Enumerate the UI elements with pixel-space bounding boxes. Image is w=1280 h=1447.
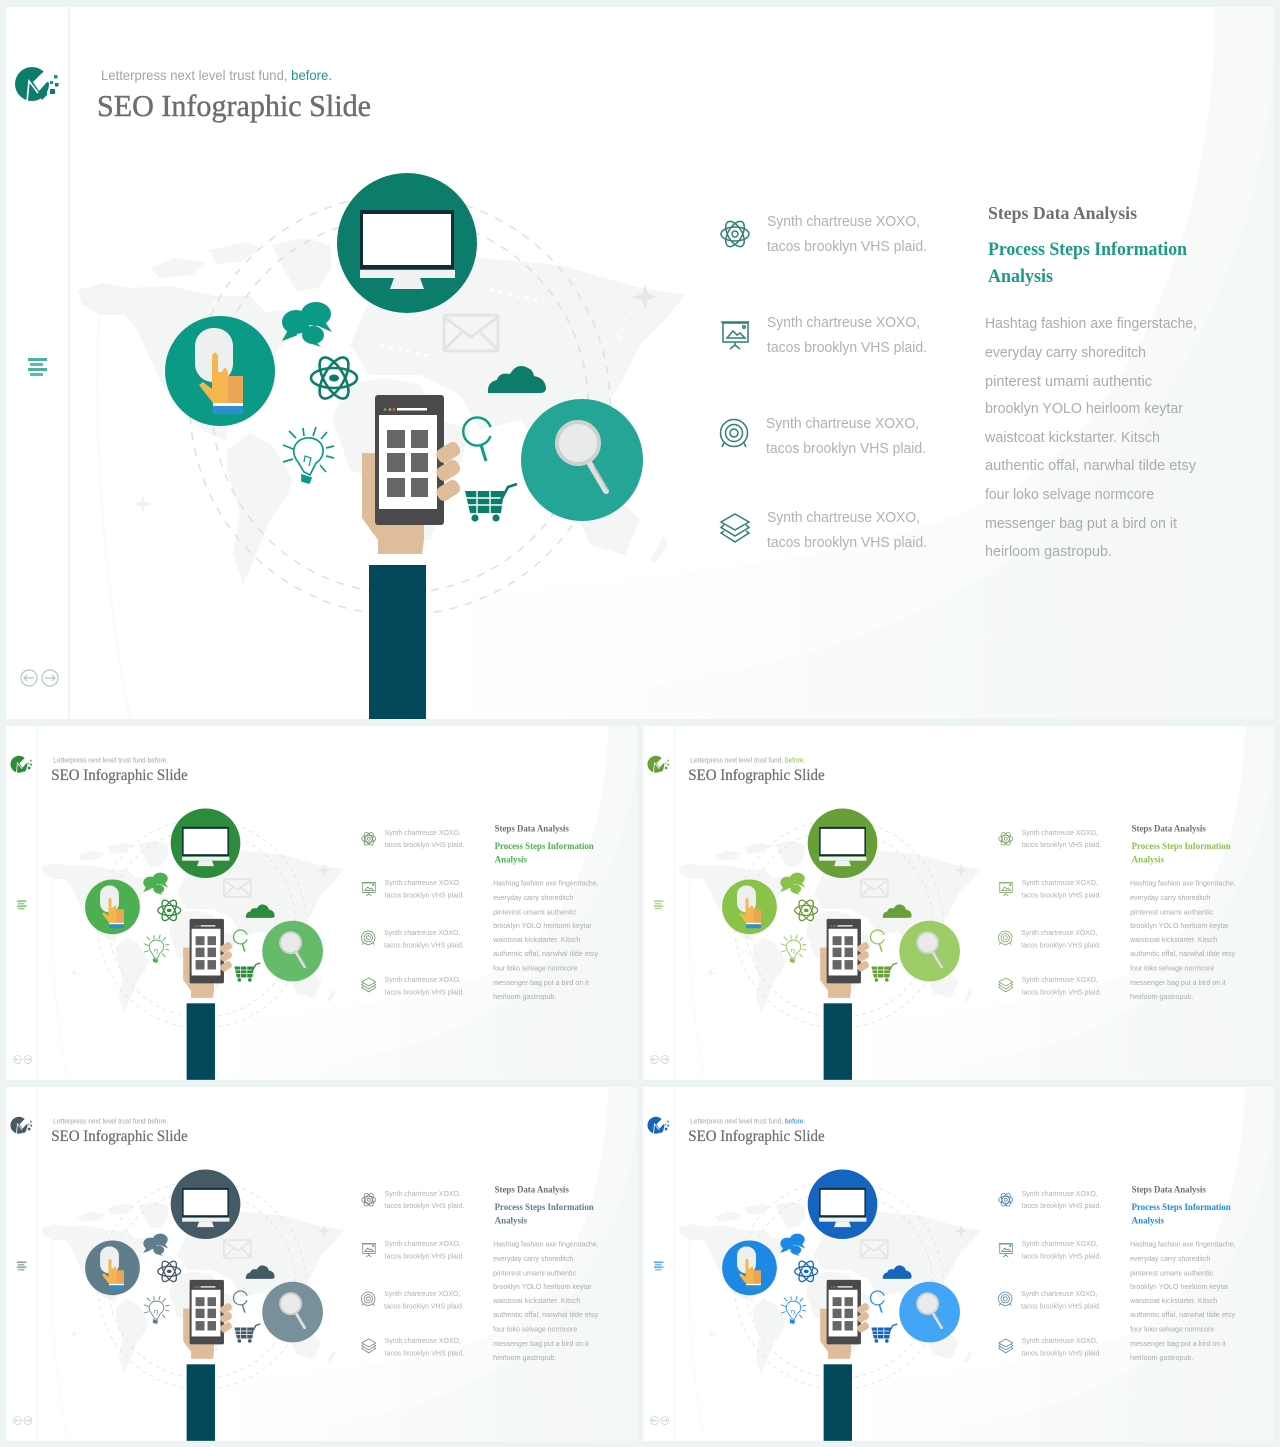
title: SEO Infographic Slide — [97, 88, 371, 123]
body text: pinterest umami authentic — [493, 1268, 577, 1277]
list item 3 — [766, 415, 926, 457]
heading: process — [495, 1203, 594, 1227]
heading: process: Process Steps Information — [988, 239, 1187, 260]
hand holding phone — [820, 919, 870, 998]
list item 1: Synth chartreuse XOXO, — [1022, 1189, 1098, 1198]
heading: process: Analysis — [988, 266, 1053, 287]
icon: shopping cart — [234, 963, 260, 982]
list item 2: Synth chartreuse XOXO, — [767, 314, 920, 331]
body text: authentic offal, narwhal tilde etsy — [1130, 1310, 1235, 1319]
list item 1: tacos brooklyn VHS plaid. — [1022, 1201, 1101, 1210]
body text: heirloom gastropub. — [1130, 992, 1193, 1001]
list item 4: Synth chartreuse XOXO, — [385, 975, 461, 984]
panel: blue slide — [643, 1087, 1274, 1441]
body text — [492, 1240, 599, 1362]
icon: atom — [311, 353, 357, 403]
icon: magnifier circle — [899, 1282, 960, 1342]
icon: monitor circle — [171, 808, 240, 878]
icon: list layers — [362, 1339, 376, 1353]
list item 3: Synth chartreuse XOXO, — [1021, 928, 1097, 937]
icon: list presentation — [721, 322, 749, 349]
list item 2: Synth chartreuse XOXO, — [1022, 878, 1098, 887]
list item 3 — [1021, 1289, 1101, 1311]
list item 2: Synth chartreuse XOXO, — [1022, 1239, 1098, 1248]
icon: light bulb — [283, 427, 334, 483]
world map — [78, 238, 685, 585]
slide background — [6, 726, 637, 1080]
icon: list layers — [999, 978, 1013, 992]
body text: four loko selvage normcore — [493, 1325, 577, 1334]
body text: authentic offal, narwhal tilde etsy — [493, 949, 598, 958]
icon: shopping cart — [871, 963, 897, 982]
body text: waistcoat kickstarter. Kitsch — [1129, 935, 1217, 944]
body text: pinterest umami authentic — [493, 907, 577, 916]
icon: menu — [28, 358, 47, 376]
body text: four loko selvage normcore — [985, 486, 1154, 503]
body text: heirloom gastropub. — [493, 1353, 556, 1362]
list item 4: Synth chartreuse XOXO, — [1022, 1336, 1098, 1345]
list item 1: tacos brooklyn VHS plaid. — [767, 238, 927, 255]
body text: Hashtag fashion axe fingerstache, — [985, 315, 1197, 332]
icon: small magnifier — [234, 930, 247, 952]
icon: envelope — [224, 1240, 251, 1258]
icon: envelope — [444, 315, 498, 351]
subtitle: Letterpress next level trust fund, before. — [690, 757, 805, 764]
hand holding phone — [183, 919, 233, 998]
list item 2 — [385, 1239, 464, 1260]
body text — [492, 879, 599, 1001]
hand holding phone — [362, 395, 462, 554]
arm sleeve — [824, 1364, 852, 1441]
icon: envelope — [224, 879, 251, 897]
slide background — [643, 1087, 1274, 1441]
icon: logo — [10, 755, 32, 773]
list item 3: Synth chartreuse XOXO, — [766, 415, 919, 432]
heading: process: Process Steps Information — [1132, 842, 1231, 852]
heading: process: Process Steps Information — [1132, 1203, 1231, 1213]
dashed orbit circles — [98, 819, 307, 1028]
body text: heirloom gastropub. — [493, 992, 556, 1001]
icon: menu — [17, 1261, 26, 1270]
world map — [42, 1202, 344, 1374]
icon: atom — [795, 1259, 818, 1284]
icon: light bulb — [781, 1296, 806, 1324]
icon: shopping cart — [871, 1324, 897, 1343]
list item 3 — [1021, 928, 1101, 950]
list item 3: Synth chartreuse XOXO, — [384, 1289, 460, 1298]
title: SEO Infographic Slide — [688, 767, 825, 784]
body text: four loko selvage normcore — [1130, 964, 1214, 973]
heading: process: Analysis — [1132, 1217, 1164, 1227]
heading: process: Process Steps Information — [495, 1203, 594, 1213]
body text: waistcoat kickstarter. Kitsch — [492, 1296, 580, 1305]
icon: list target — [362, 931, 375, 945]
list item 4 — [1022, 1336, 1101, 1357]
icon: list target — [720, 420, 748, 447]
arm sleeve — [187, 1364, 215, 1441]
icon: magnifier circle — [521, 399, 643, 521]
list item 2 — [767, 314, 927, 356]
title: SEO Infographic Slide — [51, 1128, 188, 1145]
icon: touch circle — [165, 316, 275, 426]
icon: speech bubbles — [143, 1234, 168, 1256]
hand holding phone — [183, 1280, 233, 1359]
icon: list atom — [999, 831, 1013, 847]
icon: light bulb — [144, 1296, 169, 1324]
icon: atom — [795, 898, 818, 923]
list item 4 — [385, 975, 464, 996]
world map — [679, 841, 981, 1013]
body text: everyday carry shoreditch — [493, 893, 573, 902]
heading: process: Analysis — [495, 1217, 527, 1227]
list item 4: Synth chartreuse XOXO, — [385, 1336, 461, 1345]
icon: list atom — [721, 218, 749, 250]
slide background — [6, 7, 1274, 719]
list item 4: tacos brooklyn VHS plaid. — [385, 1348, 464, 1357]
icon: small magnifier — [463, 418, 490, 461]
icon: navigation arrows — [13, 1055, 32, 1063]
icon: magnifier circle — [262, 1282, 323, 1342]
icon: atom — [158, 898, 181, 923]
icon: shopping cart — [234, 1324, 260, 1343]
icon: menu — [654, 900, 663, 909]
body text: messenger bag put a bird on it — [1130, 978, 1227, 987]
panel: light green slide — [643, 726, 1274, 1080]
body text: messenger bag put a bird on it — [493, 1339, 590, 1348]
list item 3: tacos brooklyn VHS plaid. — [766, 440, 926, 457]
icon: list atom — [999, 1192, 1013, 1208]
icon: small magnifier — [871, 930, 884, 952]
heading: process — [988, 239, 1187, 287]
icon: logo — [10, 1116, 32, 1134]
body text: authentic offal, narwhal tilde etsy — [985, 457, 1196, 474]
icon: logo — [647, 755, 669, 773]
list item 3: tacos brooklyn VHS plaid. — [384, 1302, 464, 1311]
list item 2: Synth chartreuse XOXO, — [385, 1239, 461, 1248]
title: SEO Infographic Slide — [688, 1128, 825, 1145]
heading: steps: Steps Data Analysis — [1132, 1184, 1206, 1194]
body text: pinterest umami authentic — [985, 373, 1152, 390]
icon: monitor circle — [171, 1169, 240, 1239]
icon: navigation arrows — [13, 1416, 32, 1424]
list item 4: tacos brooklyn VHS plaid. — [1022, 987, 1101, 996]
icon: list atom — [362, 1192, 376, 1208]
list item 3 — [384, 1289, 464, 1311]
list item 3 — [384, 928, 464, 950]
icon: logo — [647, 1116, 669, 1134]
body text: everyday carry shoreditch — [493, 1254, 573, 1263]
list item 1: Synth chartreuse XOXO, — [385, 828, 461, 837]
body text: Hashtag fashion axe fingerstache, — [493, 1240, 599, 1249]
icon: envelope — [861, 879, 888, 897]
icon: list layers — [721, 514, 749, 542]
arm sleeve — [824, 1003, 852, 1080]
heading: steps: Steps Data Analysis — [495, 823, 569, 833]
icon: speech bubbles — [282, 302, 332, 347]
body text: messenger bag put a bird on it — [493, 978, 590, 987]
dashed orbit circles — [735, 819, 944, 1028]
body text: waistcoat kickstarter. Kitsch — [492, 935, 580, 944]
icon: navigation arrows — [650, 1055, 669, 1063]
icon: light bulb — [144, 935, 169, 963]
icon: list presentation — [999, 883, 1013, 896]
list item 1: Synth chartreuse XOXO, — [1022, 828, 1098, 837]
list item 3: Synth chartreuse XOXO, — [384, 928, 460, 937]
icon: cloud — [246, 904, 275, 918]
icon: list target — [999, 1292, 1012, 1306]
list item 2: tacos brooklyn VHS plaid. — [385, 890, 464, 899]
body text: pinterest umami authentic — [1130, 907, 1214, 916]
heading: steps: Steps Data Analysis — [988, 203, 1137, 223]
icon: cloud — [883, 1265, 912, 1279]
list item 1 — [1022, 1189, 1101, 1210]
panel: green slide — [6, 726, 637, 1080]
icon: logo — [15, 66, 58, 102]
heading: process — [1132, 842, 1231, 866]
list item 2: Synth chartreuse XOXO, — [385, 878, 461, 887]
icon: list layers — [999, 1339, 1013, 1353]
icon: small magnifier — [871, 1291, 884, 1313]
list item 3: tacos brooklyn VHS plaid. — [1021, 1302, 1101, 1311]
list item 1 — [1022, 828, 1101, 849]
icon: envelope — [861, 1240, 888, 1258]
body text: everyday carry shoreditch — [1130, 893, 1210, 902]
body text: pinterest umami authentic — [1130, 1268, 1214, 1277]
icon: navigation arrows — [650, 1416, 669, 1424]
list item 4: tacos brooklyn VHS plaid. — [1022, 1348, 1101, 1357]
body text: messenger bag put a bird on it — [985, 515, 1178, 532]
body text — [984, 315, 1197, 560]
list item 3: tacos brooklyn VHS plaid. — [384, 941, 464, 950]
body text: heirloom gastropub. — [985, 543, 1112, 560]
list item 1: tacos brooklyn VHS plaid. — [1022, 840, 1101, 849]
icon: list layers — [362, 978, 376, 992]
icon: navigation arrows — [21, 670, 58, 686]
body text: everyday carry shoreditch — [985, 344, 1146, 361]
subtitle: Letterpress next level trust fund, before. — [101, 67, 332, 83]
icon: touch circle — [85, 1241, 140, 1295]
body text — [1129, 879, 1236, 1001]
body text: Hashtag fashion axe fingerstache, — [1130, 1240, 1236, 1249]
list item 4: Synth chartreuse XOXO, — [1022, 975, 1098, 984]
icon: light bulb — [781, 935, 806, 963]
body text — [1129, 1240, 1236, 1362]
list item 4: tacos brooklyn VHS plaid. — [767, 534, 927, 551]
icon: list presentation — [999, 1244, 1013, 1257]
list item 2: tacos brooklyn VHS plaid. — [1022, 890, 1101, 899]
icon: list target — [362, 1292, 375, 1306]
heading: process: Process Steps Information — [495, 842, 594, 852]
list item 4: tacos brooklyn VHS plaid. — [385, 987, 464, 996]
world map — [42, 841, 344, 1013]
list item 1: Synth chartreuse XOXO, — [385, 1189, 461, 1198]
list item 1: Synth chartreuse XOXO, — [767, 213, 920, 230]
list item 1 — [767, 213, 927, 255]
body text: four loko selvage normcore — [1130, 1325, 1214, 1334]
heading: process — [495, 842, 594, 866]
icon: monitor circle — [337, 173, 477, 313]
body text: waistcoat kickstarter. Kitsch — [1129, 1296, 1217, 1305]
icon: shopping cart — [465, 484, 517, 522]
panel: slate slide — [6, 1087, 637, 1441]
slide background — [6, 1087, 637, 1441]
icon: cloud — [246, 1265, 275, 1279]
subtitle: Letterpress next level trust fund before. — [53, 757, 168, 764]
list item 2 — [385, 878, 464, 899]
body text: authentic offal, narwhal tilde etsy — [493, 1310, 598, 1319]
dashed orbit circles — [98, 1180, 307, 1389]
heading: steps: Steps Data Analysis — [1132, 823, 1206, 833]
body text: Hashtag fashion axe fingerstache, — [493, 879, 599, 888]
list item 4 — [385, 1336, 464, 1357]
arm sleeve — [187, 1003, 215, 1080]
heading: process: Analysis — [1132, 856, 1164, 866]
dashed orbit circles — [190, 195, 610, 615]
body text: brooklyn YOLO heirloom keytar — [1130, 1282, 1229, 1291]
list item 1 — [385, 1189, 464, 1210]
list item 3: Synth chartreuse XOXO, — [1021, 1289, 1097, 1298]
heading: process: Analysis — [495, 856, 527, 866]
list item 2 — [1022, 878, 1101, 899]
list item 2: tacos brooklyn VHS plaid. — [767, 339, 927, 356]
icon: small magnifier — [234, 1291, 247, 1313]
body text: brooklyn YOLO heirloom keytar — [493, 1282, 592, 1291]
icon: speech bubbles — [143, 873, 168, 895]
icon: list presentation — [362, 883, 376, 896]
icon: menu — [654, 1261, 663, 1270]
body text: brooklyn YOLO heirloom keytar — [1130, 921, 1229, 930]
hand holding phone — [820, 1280, 870, 1359]
panel: main teal slide — [6, 7, 1274, 719]
icon: atom — [158, 1259, 181, 1284]
icon: cloud — [883, 904, 912, 918]
icon: monitor circle — [808, 808, 877, 878]
list item 4 — [1022, 975, 1101, 996]
title: SEO Infographic Slide — [51, 767, 188, 784]
subtitle: Letterpress next level trust fund, before. — [690, 1118, 805, 1125]
body text: Hashtag fashion axe fingerstache, — [1130, 879, 1236, 888]
icon: touch circle — [722, 1241, 777, 1295]
list item 2: tacos brooklyn VHS plaid. — [385, 1251, 464, 1260]
icon: list target — [999, 931, 1012, 945]
icon: speech bubbles — [780, 1234, 805, 1256]
list item 1: tacos brooklyn VHS plaid. — [385, 1201, 464, 1210]
list item 3: tacos brooklyn VHS plaid. — [1021, 941, 1101, 950]
list item 1: tacos brooklyn VHS plaid. — [385, 840, 464, 849]
body text: brooklyn YOLO heirloom keytar — [493, 921, 592, 930]
icon: magnifier circle — [899, 921, 960, 981]
icon: cloud — [488, 366, 546, 393]
body text: messenger bag put a bird on it — [1130, 1339, 1227, 1348]
icon: menu — [17, 900, 26, 909]
world map — [679, 1202, 981, 1374]
icon: list presentation — [362, 1244, 376, 1257]
list item 4: Synth chartreuse XOXO, — [767, 509, 920, 526]
body text: heirloom gastropub. — [1130, 1353, 1193, 1362]
arm sleeve — [369, 565, 426, 719]
body text: waistcoat kickstarter. Kitsch — [984, 429, 1160, 446]
heading: process — [1132, 1203, 1231, 1227]
icon: speech bubbles — [780, 873, 805, 895]
heading: steps: Steps Data Analysis — [495, 1184, 569, 1194]
body text: four loko selvage normcore — [493, 964, 577, 973]
subtitle: Letterpress next level trust fund before. — [53, 1118, 168, 1125]
list item 2 — [1022, 1239, 1101, 1260]
icon: touch circle — [85, 880, 140, 934]
icon: list atom — [362, 831, 376, 847]
list item 1 — [385, 828, 464, 849]
icon: touch circle — [722, 880, 777, 934]
slide background — [643, 726, 1274, 1080]
list item 2: tacos brooklyn VHS plaid. — [1022, 1251, 1101, 1260]
icon: magnifier circle — [262, 921, 323, 981]
body text: authentic offal, narwhal tilde etsy — [1130, 949, 1235, 958]
body text: brooklyn YOLO heirloom keytar — [985, 400, 1183, 417]
list item 4 — [767, 509, 927, 551]
body text: everyday carry shoreditch — [1130, 1254, 1210, 1263]
icon: monitor circle — [808, 1169, 877, 1239]
dashed orbit circles — [735, 1180, 944, 1389]
